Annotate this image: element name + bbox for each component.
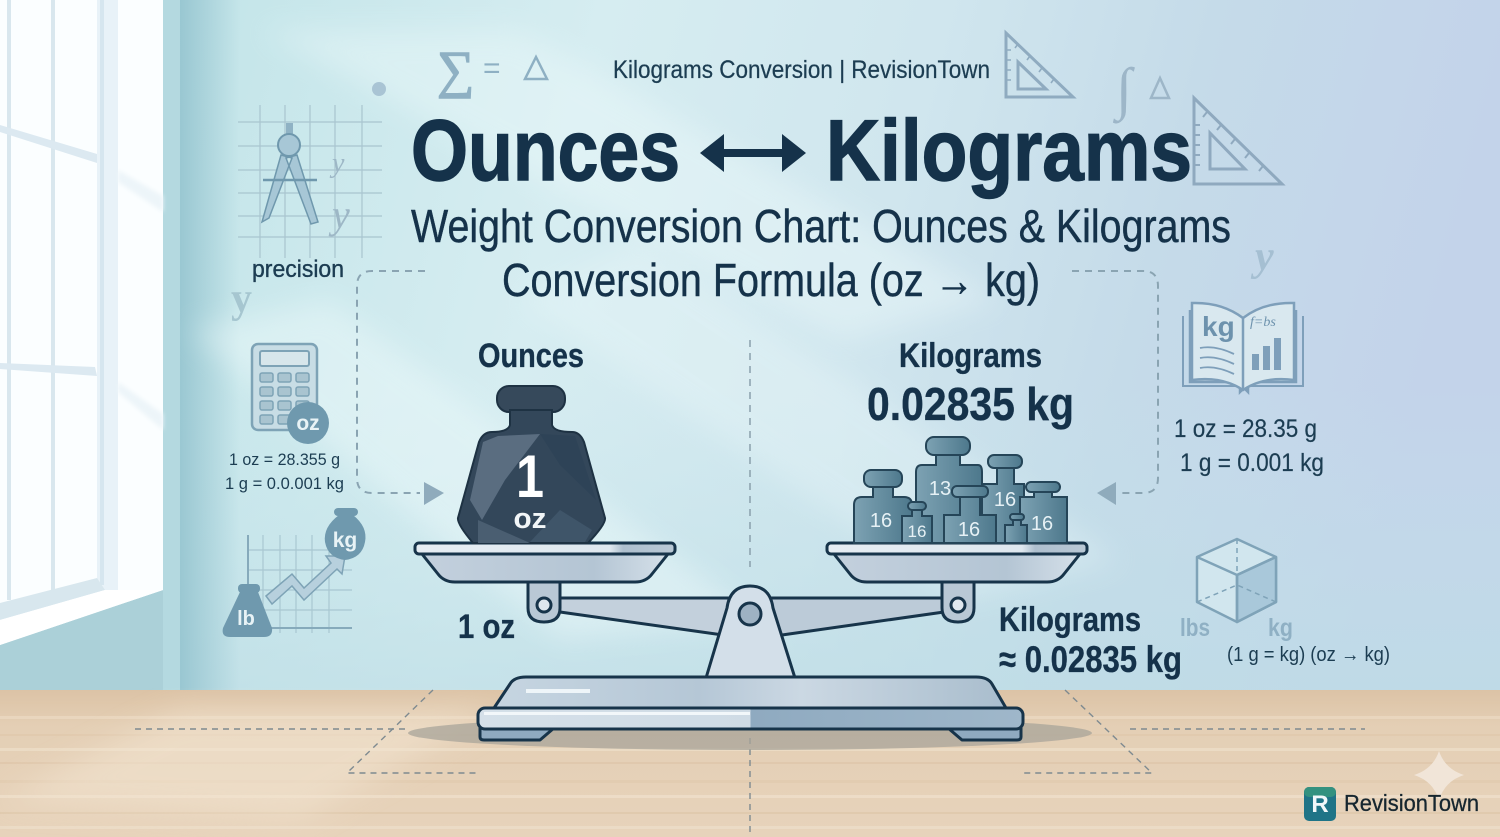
window xyxy=(0,0,180,690)
icon: kg weight xyxy=(325,508,366,560)
big 1 oz weight xyxy=(458,386,605,543)
left column heading: Ounces xyxy=(478,337,584,375)
icon: open book xyxy=(1183,303,1303,392)
weight 13 xyxy=(916,437,982,543)
dashed guide lines on table xyxy=(135,690,1365,837)
result: kilograms: Kilograms xyxy=(999,601,1141,639)
weight 13: 13 xyxy=(929,478,951,500)
big 1 oz weight: oz xyxy=(514,503,546,535)
calculator note: 1 g = 0.0.001 kg xyxy=(225,474,344,493)
integral and triangle: ∫ xyxy=(1112,56,1135,124)
label: 1 oz: 1 oz xyxy=(458,608,515,646)
center post xyxy=(706,586,795,678)
arrow right xyxy=(1097,482,1116,505)
right pan xyxy=(827,543,1087,582)
center dashed divider xyxy=(749,340,751,567)
icon: compass on grid: y xyxy=(328,192,350,237)
wooden table top xyxy=(0,690,1500,837)
icon: lb weight: lb xyxy=(237,608,255,630)
title: Ounces xyxy=(411,103,680,199)
icon: compass on grid xyxy=(238,105,382,258)
calculator note: 1 oz = 28.355 g xyxy=(229,450,340,469)
logo xyxy=(1304,787,1479,821)
icon: open book: f=bs xyxy=(1250,315,1276,330)
label: precision: precision xyxy=(252,256,344,283)
decorative y left: y xyxy=(231,276,252,322)
right column heading: Kilograms xyxy=(899,337,1042,375)
scale xyxy=(415,543,1087,740)
decorative math symbols: sigma equals delta xyxy=(437,42,547,99)
icon: sparkle xyxy=(1414,751,1464,800)
icon: calculator with oz badge xyxy=(252,344,329,444)
weight right 16 xyxy=(1020,482,1067,543)
decorative math symbols: sigma equals delta: ∑ xyxy=(437,42,474,99)
integral and triangle xyxy=(1112,56,1169,124)
result: kilograms xyxy=(999,601,1182,680)
decorative math symbols: sigma equals delta: = xyxy=(483,52,501,85)
weight front 16 xyxy=(944,486,996,543)
note: ounce to gram: 1 oz = 28.35 g xyxy=(1174,415,1317,443)
arrow left xyxy=(424,482,444,505)
icon: lb to kg growth chart xyxy=(223,508,366,637)
weight back 16 xyxy=(982,455,1024,543)
scale shadow xyxy=(408,716,1092,750)
formula heading: Conversion Formula (oz → kg) xyxy=(502,254,1040,306)
weight left 16 xyxy=(854,470,912,543)
icon: large set square xyxy=(1194,98,1282,184)
calculator note xyxy=(225,450,344,493)
note: ounce to gram xyxy=(1174,415,1324,477)
logo: R xyxy=(1311,791,1329,818)
weight small 16: 16 xyxy=(908,522,926,541)
weight left 16: 16 xyxy=(870,510,892,532)
title: Kilograms xyxy=(826,103,1192,199)
icon: small set square xyxy=(1006,33,1073,97)
base xyxy=(478,677,1023,740)
small weights group xyxy=(854,437,1067,543)
weight back 16: 16 xyxy=(994,489,1016,511)
subtitle: Weight Conversion Chart: Ounces & Kilograms xyxy=(411,200,1231,252)
title xyxy=(411,103,1192,199)
cube labels: kg xyxy=(1268,614,1293,642)
right column heading: 0.02835 kg xyxy=(867,378,1074,430)
pan supports xyxy=(528,580,974,622)
header text: Kilograms Conversion | RevisionTown xyxy=(613,56,990,84)
result: kilograms: ≈ 0.02835 kg xyxy=(999,639,1182,680)
logo: RevisionTown xyxy=(1344,790,1479,816)
icon: compass on grid: y xyxy=(329,148,345,179)
left pan xyxy=(415,543,675,582)
weight tiny xyxy=(1005,514,1027,543)
arrow: double headed xyxy=(700,134,806,172)
note: ounce to gram: 1 g = 0.001 kg xyxy=(1180,449,1324,477)
decorative y right: y xyxy=(1250,234,1274,280)
weight right 16: 16 xyxy=(1031,513,1053,535)
big 1 oz weight: 1 xyxy=(516,443,544,510)
cube note: (1 g = kg) (oz → kg) xyxy=(1227,644,1390,666)
beam xyxy=(558,598,944,636)
icon: calculator with oz badge: oz xyxy=(296,412,320,435)
cube labels xyxy=(1180,614,1293,642)
icon: lb weight xyxy=(223,584,272,637)
dot xyxy=(372,82,386,96)
cube labels: lbs xyxy=(1180,614,1210,642)
dashed bracket left xyxy=(357,271,425,493)
icon: open book: kg xyxy=(1202,311,1235,342)
right column heading xyxy=(867,337,1074,430)
weight small 16 xyxy=(902,502,932,543)
dashed bracket right xyxy=(1072,271,1158,493)
weight front 16: 16 xyxy=(958,519,980,541)
icon: cube xyxy=(1197,539,1276,622)
icon: kg weight: kg xyxy=(333,529,357,552)
